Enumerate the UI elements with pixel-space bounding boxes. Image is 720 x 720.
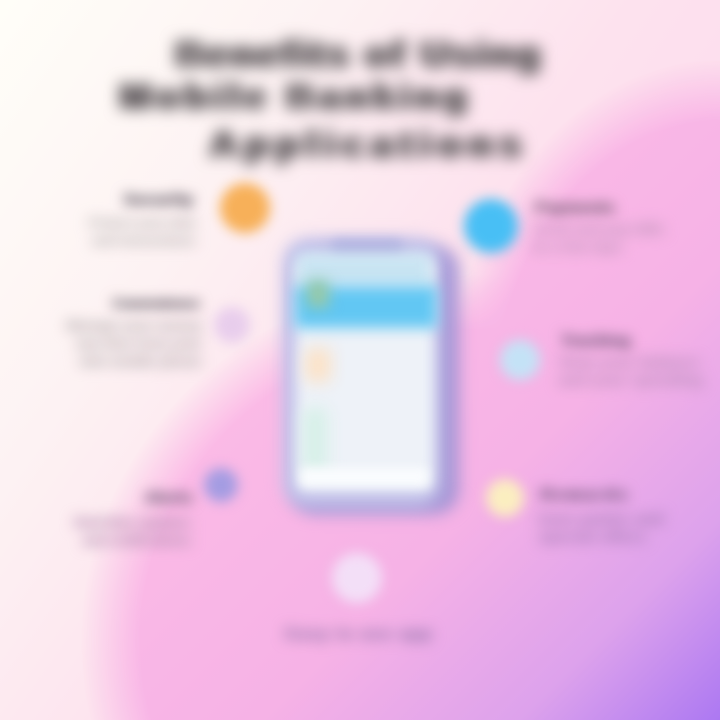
description: [532, 219, 664, 258]
description: [557, 352, 704, 391]
icon: orange circle: [220, 183, 270, 233]
icon: pale yellow circle: [486, 479, 524, 517]
green list icon: [303, 408, 327, 472]
phone body: [283, 238, 441, 506]
phone shadow: [291, 246, 459, 514]
description: and transactions: [91, 233, 195, 248]
icon: indigo circle: [204, 468, 238, 502]
description: Send and pay bills: [532, 221, 664, 238]
feature: middle right: [495, 327, 704, 391]
icon: pale circle: [332, 553, 382, 603]
feature: bottom left: [69, 461, 245, 553]
feature: bottom centre: [280, 548, 436, 648]
description: Protect your data: [88, 215, 195, 230]
description: any time from your: [75, 335, 201, 351]
description: [87, 214, 198, 251]
description: [69, 510, 192, 553]
description: and your spending: [558, 372, 702, 389]
description: special offers: [538, 529, 646, 546]
feature: bottom right: [480, 474, 666, 549]
description: [534, 510, 666, 549]
title: Benefits of Using: [176, 34, 543, 76]
title: [108, 28, 552, 174]
screen top bar: [297, 254, 431, 286]
heading: Convenience: [112, 295, 199, 311]
heading: Security: [123, 190, 193, 209]
heading: Tracking: [560, 331, 630, 350]
phone notch: [331, 240, 403, 254]
description: [62, 315, 204, 373]
description: and notifications: [82, 533, 190, 548]
description: in a few taps: [532, 239, 622, 256]
description: Manage your money: [66, 317, 201, 333]
screen footer: [301, 468, 427, 486]
icon: pale lilac circle: [214, 307, 250, 343]
green tile: [307, 280, 329, 308]
icon: blue circle: [464, 199, 518, 253]
title: Mobile Banking: [120, 76, 472, 117]
feature: top right: [455, 190, 664, 262]
orange list icon: [305, 348, 331, 382]
icon: pale blue circle: [500, 340, 540, 380]
description: Real-time updates: [74, 515, 190, 530]
description: View your balance: [558, 354, 699, 371]
phone illustration: [274, 228, 470, 524]
feature: middle left: [62, 290, 253, 373]
heading: Rewards: [540, 485, 629, 504]
heading: Alerts: [144, 488, 192, 507]
description: own mobile phone: [78, 353, 201, 369]
description: Earn points and: [538, 511, 663, 528]
heading: Payments: [534, 198, 614, 217]
title: Applications: [210, 124, 528, 166]
feature: top left: [87, 174, 279, 251]
caption: Easy to use app: [285, 626, 432, 643]
phone screen: [297, 258, 433, 490]
screen header banner: [295, 286, 437, 328]
